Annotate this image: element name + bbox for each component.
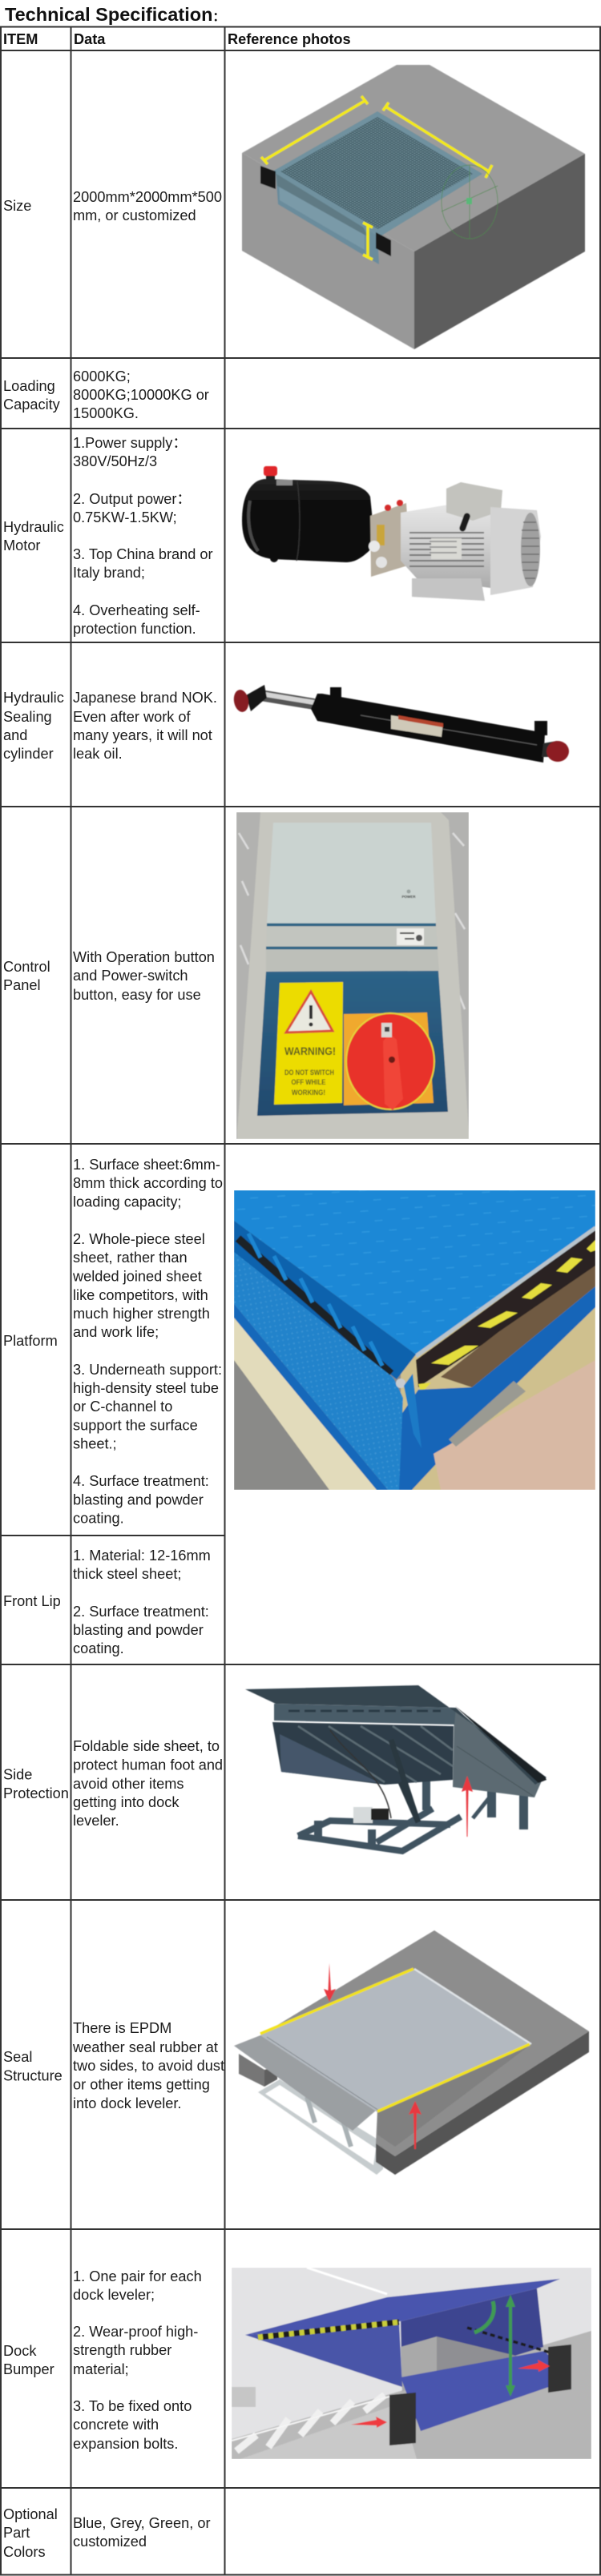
- data text: material;: [73, 2361, 129, 2377]
- photo: hydraulic power unit: [242, 466, 541, 601]
- data text: 6000KG;: [73, 368, 131, 384]
- data text: Blue, Grey, Green, or: [73, 2515, 211, 2531]
- data text: platform: high-density steel tube: [73, 1380, 219, 1396]
- photo: control box: OFF WHILE: [292, 1078, 325, 1087]
- arrow: red up arrow: [462, 1776, 473, 1837]
- row: seal structure: [3, 1930, 589, 2175]
- data text: platform: sheet.;: [73, 1435, 117, 1451]
- data text: Italy brand;: [73, 565, 145, 581]
- data text: platform: 8mm thick according to: [73, 1175, 223, 1191]
- item label: Motor: [3, 537, 40, 553]
- data text: front lip: thick steel sheet;: [73, 1566, 181, 1582]
- data text: platform: and work life;: [73, 1324, 159, 1340]
- row: control panel: [3, 812, 469, 1139]
- data text: leveler.: [73, 1813, 119, 1829]
- item label: Part: [3, 2525, 30, 2541]
- header: item: ITEM: [3, 31, 38, 47]
- item label: Loading: [3, 378, 55, 394]
- photo: control box: [236, 812, 469, 1139]
- data text: protection function.: [73, 621, 196, 637]
- data text: many years, it will not: [73, 727, 212, 743]
- data text: getting into dock: [73, 1794, 179, 1810]
- table header row: [3, 31, 351, 47]
- data text: platform: blasting and powder: [73, 1491, 204, 1507]
- photo: control box: WORKING!: [292, 1089, 325, 1097]
- data text: There is EPDM: [73, 2020, 171, 2036]
- data text: 8000KG;10000KG or: [73, 387, 209, 403]
- data text: concrete with: [73, 2417, 159, 2433]
- photo: dock pit in concrete block: [242, 65, 585, 349]
- data text: platform: or C-channel to: [73, 1399, 172, 1415]
- photo: control box: POWER: [401, 895, 416, 899]
- header: reference photos: Reference photos: [228, 31, 351, 47]
- data text: platform: 1. Surface sheet:6mm-: [73, 1157, 220, 1173]
- row: loading capacity: [3, 368, 209, 421]
- data text: button, easy for use: [73, 987, 201, 1003]
- data text: 1. One pair for each: [73, 2268, 202, 2284]
- item label: Optional: [3, 2506, 58, 2522]
- data text: front lip: 2. Surface treatment:: [73, 1604, 209, 1620]
- photo: seal structure on dock: [234, 1930, 589, 2175]
- data text: weather seal rubber at: [72, 2039, 218, 2055]
- row: hydraulic motor: [3, 435, 541, 637]
- data text: platform: coating.: [73, 1511, 124, 1527]
- data text: dock leveler;: [73, 2287, 155, 2303]
- data text: two sides, to avoid dust: [73, 2058, 224, 2074]
- data text: 2. Output power：: [73, 491, 192, 507]
- item label: cylinder: [3, 746, 54, 762]
- item label: Protection: [3, 1785, 69, 1801]
- data text: platform: much higher strength: [73, 1306, 210, 1322]
- item label: Panel: [3, 977, 41, 993]
- item label: Seal: [3, 2049, 32, 2065]
- item label: Dock: [3, 2343, 37, 2359]
- photo: hydraulic cylinder: [232, 685, 569, 763]
- arrow: red left arrow: [351, 2417, 387, 2428]
- data text: With Operation button: [73, 949, 215, 965]
- data text: front lip: coating.: [73, 1640, 124, 1656]
- data text: leak oil.: [73, 746, 123, 762]
- row: hydraulic sealing and cylinder: [3, 685, 569, 763]
- data text: 2. Wear-proof high-: [73, 2324, 198, 2340]
- data text: 2000mm*2000mm*500: [73, 189, 222, 205]
- item label: Hydraulic: [3, 519, 64, 535]
- item label: front lip: Front Lip: [3, 1593, 61, 1609]
- data text: 3. Top China brand or: [73, 546, 213, 562]
- arrow: green double arrow: [506, 2295, 515, 2397]
- row: optional part colors: [3, 2506, 211, 2560]
- data text: platform: welded joined sheet: [72, 1269, 202, 1285]
- photo: dock leveler with side sheet: [245, 1685, 547, 1851]
- item label: Structure: [3, 2068, 63, 2084]
- data text: 4. Overheating self-: [73, 602, 200, 618]
- data text: Even after work of: [73, 709, 192, 725]
- arrow: red up arrow: [409, 2101, 422, 2149]
- data text: 0.75KW-1.5KW;: [73, 509, 177, 525]
- photo: control box: DO NOT SWITCH: [284, 1069, 334, 1077]
- data text: 1.Power supply：: [73, 435, 188, 451]
- data text: platform: sheet, rather than: [73, 1250, 188, 1266]
- data text: and Power-switch: [73, 968, 188, 984]
- data text: 380V/50Hz/3: [73, 453, 157, 469]
- item label: Hydraulic: [3, 690, 64, 706]
- item label: Side: [3, 1767, 32, 1783]
- row: platform and front lip: [3, 1157, 595, 1656]
- item label: Capacity: [3, 396, 61, 413]
- row: dock bumper: [3, 2268, 591, 2459]
- arrow: red right arrow: [518, 2360, 550, 2372]
- data text: platform: support the surface: [73, 1418, 198, 1434]
- title: Technical Specification：: [5, 4, 224, 25]
- data text: strength rubber: [73, 2342, 171, 2358]
- header: data: Data: [74, 31, 106, 47]
- data text: platform: 2. Whole-piece steel: [73, 1231, 205, 1247]
- arrow: green curved arrow: [474, 2301, 494, 2332]
- item label: platform: Platform: [3, 1333, 58, 1349]
- item label: Colors: [3, 2544, 46, 2560]
- item label: Control: [3, 959, 50, 975]
- data text: protect human foot and: [73, 1757, 223, 1773]
- data text: platform: like competitors, with: [73, 1287, 208, 1303]
- data text: into dock leveler.: [73, 2095, 181, 2111]
- item label: Sealing: [3, 709, 52, 725]
- item label: Size: [3, 198, 31, 214]
- item label: Bumper: [3, 2361, 54, 2377]
- data text: 3. To be fixed onto: [73, 2398, 192, 2414]
- row: side protection: [3, 1685, 547, 1851]
- data text: platform: 4. Surface treatment:: [73, 1473, 209, 1489]
- data text: customized: [73, 2534, 147, 2550]
- data text: Japanese brand NOK.: [73, 690, 217, 706]
- data text: expansion bolts.: [73, 2436, 178, 2452]
- data text: 15000KG.: [73, 405, 139, 421]
- row: size: [3, 65, 585, 349]
- photo: dock bumper render: [232, 2268, 591, 2459]
- data text: or other items getting: [73, 2076, 210, 2092]
- data text: Foldable side sheet, to: [73, 1738, 220, 1754]
- data text: platform: loading capacity;: [73, 1193, 181, 1210]
- data text: avoid other items: [73, 1776, 184, 1792]
- data text: front lip: blasting and powder: [73, 1622, 204, 1638]
- item label: and: [3, 727, 27, 743]
- photo: control box: WARNING!: [284, 1044, 336, 1057]
- data text: mm, or customized: [73, 207, 196, 223]
- arrow: red down arrow: [324, 1963, 336, 2002]
- data text: front lip: 1. Material: 12-16mm: [73, 1548, 211, 1564]
- photo: blue dock leveler platform: [234, 1190, 595, 1490]
- data text: platform: 3. Underneath support:: [73, 1362, 222, 1378]
